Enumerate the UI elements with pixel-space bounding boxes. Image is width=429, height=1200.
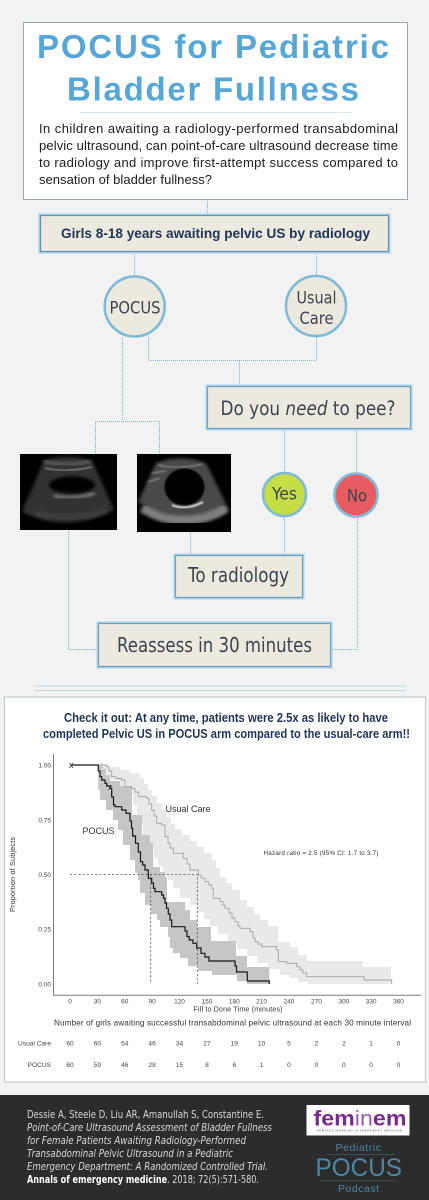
chart: y axis labels (38, 762, 51, 988)
citation: Emergency Department: A Randomized Controlled Trial. (27, 1161, 268, 1173)
citation: Annals of emergency medicine. 2018; 72(5):571-580. (27, 1174, 259, 1186)
box: population (40, 215, 389, 252)
at risk row: Usual Care (18, 1040, 401, 1048)
at risk row: Usual Care: 5 (287, 1040, 291, 1048)
title: POCUS for Pediatric (37, 28, 389, 65)
box: To radiology (175, 555, 303, 598)
chart: POCUS confidence band (98, 765, 269, 984)
chart: x axis labels: 30 (94, 998, 101, 1006)
chart: x axis labels: 180 (229, 998, 240, 1006)
at risk row: POCUS (28, 1062, 401, 1069)
box: Do you need to pee: Do you need to pee? (220, 397, 396, 420)
chart: censor marks: x (99, 760, 104, 770)
footer panel (0, 1095, 429, 1200)
at risk row: POCUS: 1 (260, 1062, 264, 1069)
box: population: Girls 8-18 years awaiting pelvic US by radiology (61, 225, 370, 241)
question text: In children awaiting a radiology-performed transabdominal (39, 121, 398, 136)
at risk row: POCUS: 8 (205, 1062, 209, 1069)
chart: x axis labels: 210 (256, 998, 267, 1006)
question text (39, 121, 398, 187)
circle: No: No (347, 486, 367, 506)
chart: x axis labels: 90 (148, 998, 156, 1006)
chart: y axis labels: 0.25 (38, 926, 51, 933)
chart: y axis labels: 0.00 (38, 981, 51, 988)
chart: x axis labels: 330 (366, 998, 377, 1006)
circle: POCUS: POCUS (110, 298, 160, 318)
at risk row: Usual Care: 46 (148, 1040, 156, 1048)
logo: Pediatric POCUS Podcast (316, 1142, 402, 1195)
connectors: flowchart (68, 199, 358, 650)
question text: pelvic ultrasound, can point-of-care ultrasound decrease time (39, 138, 398, 153)
box: Reassess in 30 minutes (98, 623, 331, 667)
chart: median dashed lines (70, 874, 197, 984)
chart: x axis labels: 150 (201, 998, 213, 1006)
chart: censor marks (69, 760, 113, 792)
at risk row: POCUS: 28 (148, 1062, 156, 1069)
chart: curve labels: POCUS (82, 826, 114, 836)
chart: x axis labels: 270 (311, 998, 322, 1006)
at risk row: Usual Care: 19 (231, 1040, 238, 1048)
at risk row: Usual Care: 34 (176, 1040, 183, 1048)
logo: feminem (306, 1105, 410, 1136)
chart: curve labels (82, 804, 210, 836)
at risk row: POCUS: POCUS (28, 1062, 52, 1069)
circle: Usual Care: Usual (296, 288, 336, 308)
at risk row: Usual Care: 0 (397, 1040, 401, 1048)
box: Reassess in 30 minutes: Reassess in 30 minutes (117, 633, 312, 657)
chart: x axis labels: 360 (393, 998, 404, 1006)
chart: x axis labels: 0 (68, 998, 72, 1006)
chart: censor marks: x (108, 782, 113, 792)
at risk row: Usual Care: 27 (203, 1040, 211, 1048)
at risk row: POCUS: 15 (176, 1062, 183, 1069)
image: ultrasound partial bladder (20, 454, 117, 530)
at risk row: POCUS: 6 (232, 1062, 236, 1069)
chart: y axis title: Proportion of Subjects (8, 837, 17, 912)
at risk row: POCUS: 0 (342, 1062, 346, 1069)
circle: POCUS (105, 276, 165, 336)
circle: No (334, 474, 378, 516)
at risk row: Usual Care: 54 (121, 1040, 129, 1048)
panel: title and question (24, 22, 408, 200)
at risk row: POCUS: 0 (315, 1062, 319, 1069)
chart heading (43, 711, 410, 741)
panel: survival chart (4, 697, 426, 1082)
chart: x axis labels: 300 (338, 998, 350, 1006)
title (37, 28, 389, 108)
at risk row: POCUS: 59 (94, 1062, 101, 1069)
chart: usual care confidence band (100, 765, 391, 984)
chart: x axis labels: 240 (284, 998, 295, 1006)
chart: x axis labels (68, 998, 404, 1006)
citation: Dessie A, Steele D, Liu AR, Amanullah S, Constantine E. (27, 1109, 264, 1121)
at risk row: POCUS: 60 (66, 1062, 74, 1069)
box: Do you need to pee (207, 386, 411, 429)
question text: to radiology and improve first-attempt success compared to (39, 155, 398, 170)
at risk row: Usual Care: 2 (342, 1040, 346, 1048)
box: To radiology: To radiology (187, 563, 289, 587)
at risk table heading: Number of girls awaiting successful transabdominal pelvic ultrasound at each 30 minute interval (54, 1018, 411, 1028)
chart: usual care curve (100, 765, 392, 984)
at risk row: Usual Care: 2 (315, 1040, 319, 1048)
chart: x axis labels: 60 (121, 998, 129, 1006)
circle: Yes (263, 473, 306, 516)
title: Bladder Fullness (67, 70, 359, 108)
at risk row: Usual Care: 10 (258, 1040, 266, 1048)
chart heading: Check it out: At any time, patients were 2.5x as likely to have (64, 711, 388, 725)
at risk row: Usual Care: Usual Care (18, 1040, 51, 1048)
citation: Point-of-Care Ultrasound Assessment of Bladder Fullness (27, 1122, 272, 1134)
chart: y axis labels: 1.00 (38, 762, 51, 769)
at risk row: POCUS: 0 (287, 1062, 291, 1069)
circle: Yes: Yes (271, 484, 297, 504)
chart: axes (54, 754, 421, 995)
logo: feminem: FEMALES WORKING IN EMERGENCY MEDICINE (317, 1128, 402, 1132)
at risk row: Usual Care: 1 (369, 1040, 373, 1048)
chart: curve labels: Usual Care (166, 804, 210, 814)
at risk row: POCUS: 0 (397, 1062, 401, 1069)
at risk row: Usual Care: 60 (94, 1040, 101, 1048)
chart: y axis labels: 0.50 (38, 872, 51, 879)
logo: Pediatric POCUS Podcast: POCUS (316, 1154, 402, 1182)
logo: Pediatric POCUS Podcast: Pediatric (336, 1142, 381, 1154)
circle: Usual Care: Care (300, 309, 334, 328)
at risk row: POCUS: 46 (121, 1062, 129, 1069)
citation: Transabdominal Pelvic Ultrasound in a Pediatric (27, 1148, 233, 1160)
citation: for Female Patients Awaiting Radiology-Performed (27, 1135, 246, 1147)
chart: hazard ratio: Hazard ratio = 2.5 (95% CI: 1.7 to 3.7) (264, 850, 378, 857)
chart: censor marks: x (69, 760, 74, 770)
at risk row: POCUS: 0 (369, 1062, 373, 1069)
chart: x axis title: Fill to Done Time (minutes) (194, 1006, 282, 1014)
circle: Usual Care (286, 276, 346, 336)
chart: x axis labels: 120 (174, 998, 185, 1006)
chart: y axis labels: 0.75 (38, 817, 51, 824)
question text: sensation of bladder fullness? (39, 172, 212, 187)
logo: feminem: feminem (314, 1108, 406, 1130)
logo: Pediatric POCUS Podcast: Podcast (338, 1183, 379, 1195)
at risk row: Usual Care: 60 (66, 1040, 74, 1048)
citation (27, 1109, 272, 1186)
chart: POCUS curve (71, 765, 269, 984)
image: ultrasound full bladder (137, 454, 231, 532)
